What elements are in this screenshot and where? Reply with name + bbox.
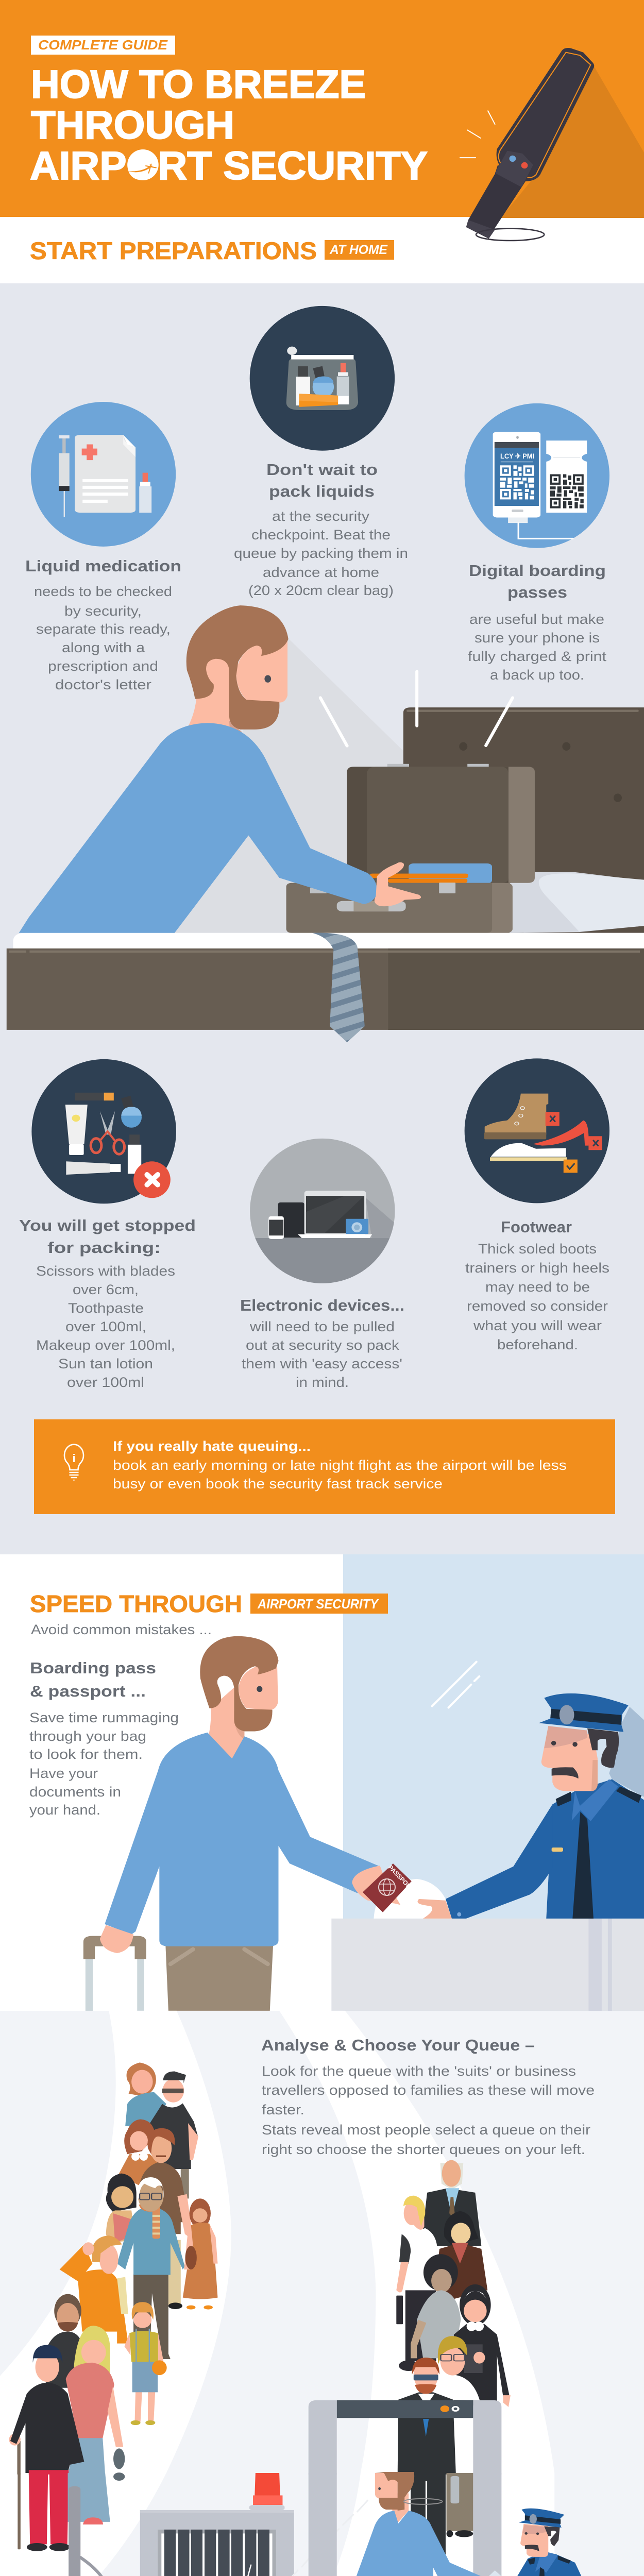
text: boarding pass and passport: through your bag [29, 1728, 146, 1744]
title: HOW TO BREEZE [31, 62, 366, 107]
person: girl with teddy bear [183, 2198, 218, 2310]
traveller head [375, 2472, 443, 2523]
text: footwear: Thick soled boots [478, 1241, 597, 1257]
text: electronic devices: in mind. [296, 1375, 349, 1390]
callout: queuing tip: busy or even book the security fast track service [113, 1476, 443, 1492]
text: footwear: beforehand. [497, 1337, 578, 1352]
text: liquid medication: along with a [62, 640, 145, 655]
text: don't wait to pack liquids: queue by packing them in [234, 546, 408, 561]
text: analyse and choose your queue: Analyse & Choose Your Queue – [261, 2036, 535, 2054]
callout: queuing tip: book an early morning or late night flight as the airport will be less [113, 1458, 567, 1473]
text: electronic devices: will need to be pulled [249, 1319, 395, 1334]
icon: light bulb [64, 1445, 83, 1480]
man skin [188, 650, 230, 730]
text: liquid medication: separate this ready, [36, 621, 171, 637]
bed base [7, 948, 644, 1030]
illustration: man packing suitcase on bed [7, 605, 644, 1047]
text: stopped for packing: Toothpaste [68, 1300, 144, 1316]
panel: header banner [0, 0, 644, 241]
text: footwear: trainers or high heels [465, 1260, 609, 1276]
heading: speed through [30, 1590, 388, 1617]
security guard [454, 2509, 644, 2576]
mattress [13, 933, 644, 948]
text: digital boarding passes: sure your phone is [474, 630, 600, 646]
icon: electronic devices [246, 1139, 398, 1285]
callout: queuing tip [34, 1419, 615, 1514]
person: blond man in white tee [396, 2196, 437, 2371]
text: boarding pass and passport: Boarding pass [30, 1659, 156, 1677]
traveller trousers [165, 1945, 273, 2011]
text: analyse and choose your queue: right so choose the shorter queues on your left. [262, 2142, 585, 2157]
badge: complete guide [31, 36, 175, 55]
person: man in black with cane [9, 2345, 84, 2475]
counter [331, 1919, 644, 2011]
traveller hair [200, 1636, 279, 1731]
text: stopped for packing: over 100ml, [65, 1319, 146, 1334]
text: analyse and choose your queue: travellers opposed to families as these will move [262, 2082, 595, 2098]
panel: speed through background [0, 1554, 644, 2011]
text: don't wait to pack liquids: Don't wait to [266, 461, 378, 479]
panel: queue background [0, 2011, 644, 2576]
detector header bar [309, 2400, 501, 2475]
traveller sweater [105, 1733, 380, 1946]
icon: light bulb: i [72, 1452, 76, 1465]
person: man in dark suit [398, 2358, 456, 2475]
text: digital boarding passes: a back up too. [490, 667, 584, 683]
officer uniform [446, 1779, 644, 1919]
heading: start preparations: START PREPARATIONS [30, 237, 317, 264]
guard cap [519, 2509, 564, 2528]
officer head [541, 1726, 598, 1791]
queue legs [18, 2472, 473, 2556]
icon: footwear [465, 1058, 609, 1203]
officer shadow [609, 1707, 644, 1797]
text: don't wait to pack liquids: pack liquids [269, 482, 375, 500]
text: digital boarding passes [468, 562, 607, 683]
text: digital boarding passes: Digital boarding [469, 562, 606, 580]
badge: complete guide: COMPLETE GUIDE [38, 37, 168, 53]
icon: metal detector wand [460, 48, 594, 241]
title [30, 62, 428, 188]
text: footwear: what you will wear [473, 1318, 602, 1333]
text: stopped for packing: Makeup over 100ml, [36, 1337, 175, 1353]
illustration: business queue [309, 2160, 511, 2475]
traveller sweater [346, 2511, 483, 2576]
guard collar and tie [526, 2551, 571, 2576]
person: blonde woman in pink top [66, 2326, 125, 2475]
text: digital boarding passes: passes [507, 583, 567, 601]
boarding card [476, 2570, 504, 2576]
text: boarding pass and passport: Save time rummaging [29, 1710, 179, 1725]
text: liquid medication: needs to be checked [34, 584, 172, 599]
text: electronic devices [240, 1296, 404, 1390]
title: AIRPORT SECURITY [30, 144, 428, 188]
panel: at home background [0, 283, 644, 1554]
person: woman in brown jacket [435, 2211, 487, 2300]
suitcase base [286, 883, 513, 933]
text: don't wait to pack liquids [234, 461, 408, 598]
text: stopped for packing: Scissors with blades [36, 1263, 175, 1279]
icon: prohibited items [31, 1059, 176, 1204]
text: liquid medication: Liquid medication [25, 557, 181, 575]
text: electronic devices: them with 'easy access' [242, 1356, 402, 1371]
person: woman in blue top [125, 2062, 166, 2126]
man sweater [19, 723, 377, 933]
heading: start preparations: AT HOME [329, 243, 388, 257]
icon: liquids bag [250, 306, 395, 451]
label: phone route text: LCY ✈ PMI [500, 452, 534, 460]
officer cap [539, 1693, 629, 1732]
suitcase contents [369, 863, 492, 884]
text: digital boarding passes: fully charged & print [468, 649, 607, 664]
person: older man in suit [423, 2160, 481, 2246]
guard head [520, 2524, 560, 2557]
passport [363, 1863, 412, 1912]
text: analyse and choose your queue: faster. [262, 2102, 304, 2117]
text: footwear: removed so consider [467, 1298, 608, 1314]
text: don't wait to pack liquids: at the security [272, 509, 370, 524]
text: digital boarding passes: are useful but make [469, 612, 604, 627]
person: woman with headband [454, 2284, 511, 2407]
traveller hands [100, 1866, 400, 1953]
text: liquid medication [25, 557, 181, 692]
text: stopped for packing: over 100ml [67, 1375, 144, 1390]
person: woman with black hair [106, 2174, 137, 2243]
man hand [375, 862, 421, 906]
label: passport cover: PASSPORT [387, 1863, 416, 1893]
subheading: avoid common mistakes: Avoid common mistakes ... [31, 1622, 212, 1637]
icon: liquid medication [31, 402, 176, 547]
officer hand [417, 1899, 452, 1919]
text: footwear: Footwear [501, 1218, 572, 1236]
guard shirt [472, 2551, 597, 2576]
text: electronic devices: out at security so pack [246, 1337, 400, 1353]
text: stopped for packing [19, 1216, 196, 1390]
x-ray scanner [140, 2510, 294, 2576]
person: man in black tee with sunglasses [150, 2072, 198, 2198]
person: man in orange shirt scratching head [60, 2235, 128, 2344]
text: liquid medication: doctor's letter [55, 677, 151, 692]
person: older man with glasses and scarf [117, 2177, 185, 2359]
text: boarding pass and passport [29, 1659, 179, 1818]
text: don't wait to pack liquids: checkpoint. Beat the [251, 527, 391, 543]
pillow [510, 872, 644, 933]
person: bearded man [46, 2294, 84, 2388]
person: blonde person with glasses [435, 2336, 480, 2400]
person: boy in yellow shirt [125, 2302, 167, 2425]
icon: globe letter O with plane [127, 149, 159, 180]
illustration: family queue [9, 2062, 218, 2475]
text: footwear [465, 1218, 609, 1352]
text: footwear: may need to be [485, 1279, 590, 1295]
headboard [403, 707, 644, 933]
person: woman with white collar [118, 2120, 158, 2187]
icon: digital boarding passes [465, 403, 609, 548]
text: boarding pass and passport: Have your [29, 1766, 98, 1781]
heading: speed through: SPEED THROUGH [30, 1590, 242, 1617]
text: don't wait to pack liquids: (20 x 20cm clear bag) [248, 583, 394, 598]
text: liquid medication: prescription and [48, 658, 158, 674]
walk-through metal detector [309, 2473, 501, 2576]
heading: speed through: AIRPORT SECURITY [257, 1596, 379, 1612]
text: liquid medication: by security, [64, 603, 142, 619]
title: THROUGH [31, 103, 234, 147]
text: stopped for packing: You will get stopped [19, 1216, 196, 1234]
suitcase handle [83, 1936, 146, 2011]
text: analyse and choose your queue: Stats reveal most people select a queue on their [262, 2122, 590, 2138]
tie [312, 933, 365, 1042]
text: boarding pass and passport: & passport ... [30, 1682, 146, 1700]
window glare [432, 1662, 479, 1708]
text: boarding pass and passport: to look for them. [29, 1747, 143, 1762]
callout: queuing tip: If you really hate queuing... [113, 1438, 311, 1454]
text: electronic devices: Electronic devices... [240, 1296, 404, 1314]
man hair and beard [187, 605, 289, 730]
wand shadow [501, 65, 644, 218]
illustration: security checkpoint [6, 2472, 644, 2576]
dashed glare line [273, 2500, 367, 2576]
text: stopped for packing: over 6cm, [73, 1282, 139, 1297]
text: boarding pass and passport: documents in [29, 1784, 121, 1800]
traveller neck and face [209, 1688, 245, 1758]
text: stopped for packing: Sun tan lotion [58, 1356, 153, 1371]
text: analyse and choose your queue [261, 2036, 595, 2157]
suitcase lid [347, 764, 535, 883]
person: man with moustache [140, 2128, 193, 2309]
person: man in grey tee with afro [411, 2254, 461, 2358]
scanner beacon [249, 2473, 284, 2510]
text: stopped for packing: for packing: [47, 1239, 161, 1257]
desk lamp stand [65, 2486, 108, 2576]
text: analyse and choose your queue: Look for the queue with the 'suits' or business [262, 2063, 576, 2079]
illustration: passport check [83, 1636, 644, 2011]
text: don't wait to pack liquids: advance at home [263, 565, 379, 580]
text: boarding pass and passport: your hand. [29, 1802, 100, 1818]
